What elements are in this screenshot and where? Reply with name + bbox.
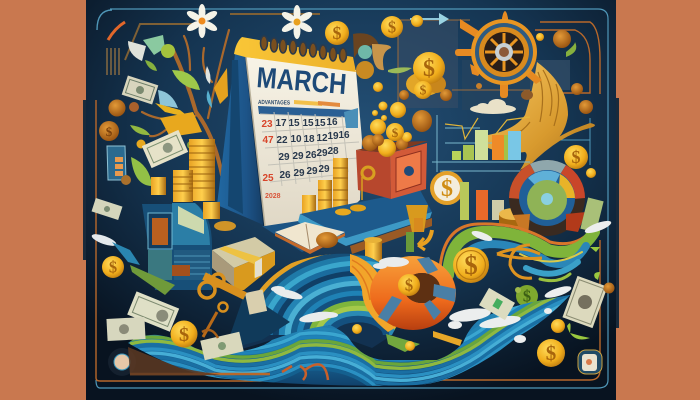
chart bars bbox=[452, 151, 461, 160]
gold coin near flower bbox=[325, 21, 349, 45]
helm spokes bbox=[485, 33, 523, 71]
orange yellow ribbon into ring bbox=[350, 254, 405, 332]
circuit frame lines bbox=[96, 9, 608, 388]
copper coins left bbox=[99, 100, 139, 141]
golden key bbox=[199, 274, 245, 338]
coin bowl bbox=[499, 208, 530, 227]
ship helm wheel bbox=[455, 11, 542, 98]
foam top right bbox=[470, 218, 613, 243]
gold coin left: $ bbox=[109, 258, 117, 276]
report bars bbox=[460, 182, 504, 220]
golden horn bbox=[488, 62, 595, 170]
platform under chest bbox=[298, 190, 432, 254]
gold coin top centre: $ bbox=[388, 18, 396, 36]
small ticket on wave bbox=[386, 334, 420, 352]
life ring bbox=[370, 256, 456, 330]
open book bbox=[275, 222, 345, 254]
copper coins left: $ bbox=[106, 124, 113, 139]
date numbers: 47 bbox=[262, 135, 274, 146]
tree with leaves bbox=[128, 30, 229, 186]
date numbers: 29 bbox=[293, 168, 305, 179]
gold coin top centre bbox=[381, 16, 403, 38]
bright bars under report bbox=[406, 205, 428, 252]
date numbers: 16 bbox=[326, 117, 338, 128]
floating leaves and horn top bbox=[353, 33, 412, 79]
date numbers: 26 bbox=[279, 170, 291, 181]
bottom left dial bbox=[108, 348, 270, 376]
hatched panel behind coins and helm bbox=[398, 20, 570, 110]
small coin on ticket bbox=[405, 341, 415, 351]
date numbers bbox=[261, 117, 350, 184]
large gold coin: $ bbox=[464, 250, 478, 280]
treasure chest bbox=[356, 141, 428, 200]
page icon bbox=[344, 108, 358, 128]
date numbers: 29 bbox=[318, 164, 330, 175]
large coin group bbox=[399, 52, 452, 101]
gold coin bottom right: $ bbox=[546, 341, 556, 365]
side panel with orange chart and blue scanner bbox=[107, 146, 131, 185]
date numbers: 29 bbox=[316, 148, 328, 159]
banknote top right of lower area bbox=[580, 198, 604, 232]
large coin group: $ bbox=[423, 56, 435, 82]
dollar emblem coin: $ bbox=[441, 176, 453, 202]
date numbers: 12 bbox=[316, 133, 328, 144]
big curved blue swirl bbox=[242, 254, 396, 348]
pile of coins above chest bbox=[362, 82, 432, 157]
gold coin stacks left of calendar bbox=[151, 139, 215, 202]
dark water between waves bbox=[225, 292, 290, 350]
foam on right wave bbox=[448, 284, 573, 343]
arrow at top bbox=[410, 13, 449, 25]
orange arrow swirl bbox=[418, 230, 432, 250]
year label: 2028 bbox=[265, 193, 281, 200]
small coin left of ticket bbox=[352, 324, 362, 334]
helm outer ring bbox=[471, 19, 537, 85]
date numbers: 28 bbox=[327, 146, 339, 157]
banknote left small bbox=[106, 317, 146, 341]
coin stack under chest bbox=[364, 237, 382, 262]
month title: MARCH bbox=[255, 62, 348, 101]
banknote below tree bbox=[142, 130, 188, 168]
foam on swirl bbox=[271, 286, 338, 324]
small coin right bbox=[551, 319, 565, 333]
tree trunk and branches bbox=[142, 30, 229, 175]
brick base bbox=[128, 347, 220, 375]
yellow strip bbox=[433, 331, 462, 346]
date numbers: 10 bbox=[290, 134, 302, 145]
calendar page bbox=[246, 57, 362, 226]
padlock icon bbox=[578, 350, 602, 374]
date numbers: 15 bbox=[314, 118, 326, 129]
upper right wave bbox=[440, 224, 594, 281]
chart line bbox=[445, 117, 530, 139]
chart axes bbox=[432, 115, 530, 172]
coin on ring bbox=[398, 274, 420, 296]
date numbers: 16 bbox=[338, 130, 350, 141]
calendar blue back stand bbox=[217, 46, 266, 226]
far right coin bbox=[604, 282, 614, 294]
bar chart bbox=[432, 115, 530, 172]
flower 1 bbox=[185, 4, 219, 38]
leaves bbox=[128, 41, 146, 61]
coin on book bbox=[316, 232, 338, 248]
date numbers: 22 bbox=[276, 135, 288, 146]
stacked copper coins under calendar bbox=[203, 202, 236, 231]
roulette wheel bbox=[509, 160, 586, 236]
date numbers: 29 bbox=[292, 151, 304, 162]
gold coin bottom left bbox=[170, 320, 198, 348]
gold bars beside chest bbox=[302, 158, 348, 215]
banknote small at foam bbox=[245, 289, 267, 315]
gold coin left bbox=[102, 256, 124, 278]
date numbers: 17 bbox=[275, 118, 287, 129]
banknote on bottom wave bbox=[200, 332, 244, 360]
date numbers: 25 bbox=[262, 173, 274, 184]
gold coin bottom right bbox=[537, 339, 565, 367]
date grid bbox=[260, 112, 359, 186]
cloud bbox=[470, 99, 516, 114]
chest left face bbox=[356, 150, 391, 199]
calendar bbox=[217, 36, 362, 226]
gold coin near flower: $ bbox=[332, 23, 342, 43]
main bottom blue wave bbox=[128, 295, 570, 386]
date numbers: 29 bbox=[306, 166, 318, 177]
foam on life ring bbox=[373, 257, 409, 269]
chest lock bbox=[404, 166, 414, 176]
coin on ring: $ bbox=[405, 276, 413, 294]
date numbers: 19 bbox=[327, 131, 339, 142]
banknote on mailbox bbox=[92, 198, 122, 220]
gold coin right of wheel: $ bbox=[571, 147, 581, 167]
mailbox machine bbox=[130, 203, 212, 295]
gold coin right of wheel bbox=[564, 145, 596, 178]
cash parcel box bbox=[212, 237, 275, 290]
golden emblem key bbox=[497, 245, 542, 278]
green dollar coin bbox=[516, 285, 538, 307]
flower 2 bbox=[280, 5, 314, 39]
subtitle row: ADVANTAGES bbox=[258, 100, 290, 107]
pile of coins above chest: $ bbox=[392, 125, 399, 140]
green leaves right bbox=[567, 247, 600, 340]
large coin group: $ bbox=[420, 82, 427, 98]
small gold coin top bbox=[411, 15, 423, 27]
chest key bbox=[362, 167, 374, 179]
date numbers: 26 bbox=[305, 150, 317, 161]
calendar rings bbox=[260, 36, 346, 62]
green dollar coin: $ bbox=[523, 287, 531, 305]
weekday header bbox=[258, 106, 354, 118]
date numbers: 15 bbox=[288, 118, 300, 129]
date numbers: 29 bbox=[278, 152, 290, 163]
wave left of machine bbox=[112, 242, 140, 265]
small coins on platform bbox=[335, 204, 366, 216]
banknote on tree bbox=[122, 76, 158, 104]
large gold coin bbox=[453, 247, 489, 283]
dollar emblem coin bbox=[430, 171, 464, 205]
foam left bbox=[90, 232, 118, 248]
chest front face bbox=[390, 143, 427, 199]
gold coin bottom left: $ bbox=[179, 324, 189, 346]
calendar yellow header bbox=[234, 37, 356, 72]
date numbers: 15 bbox=[302, 118, 314, 129]
banknote right bbox=[562, 276, 608, 328]
banknote centre right bbox=[479, 288, 515, 320]
bottom gear ornament bbox=[282, 364, 328, 380]
small green coin bbox=[515, 287, 521, 293]
helm handles bbox=[455, 11, 542, 98]
helm hub bbox=[495, 43, 513, 61]
dark central panel bbox=[86, 0, 616, 400]
date numbers: 23 bbox=[261, 119, 273, 130]
banknote left large bbox=[127, 291, 179, 332]
blue platform under calendar bbox=[222, 200, 360, 252]
date numbers: 18 bbox=[303, 134, 315, 145]
copper coins right bbox=[476, 30, 593, 114]
